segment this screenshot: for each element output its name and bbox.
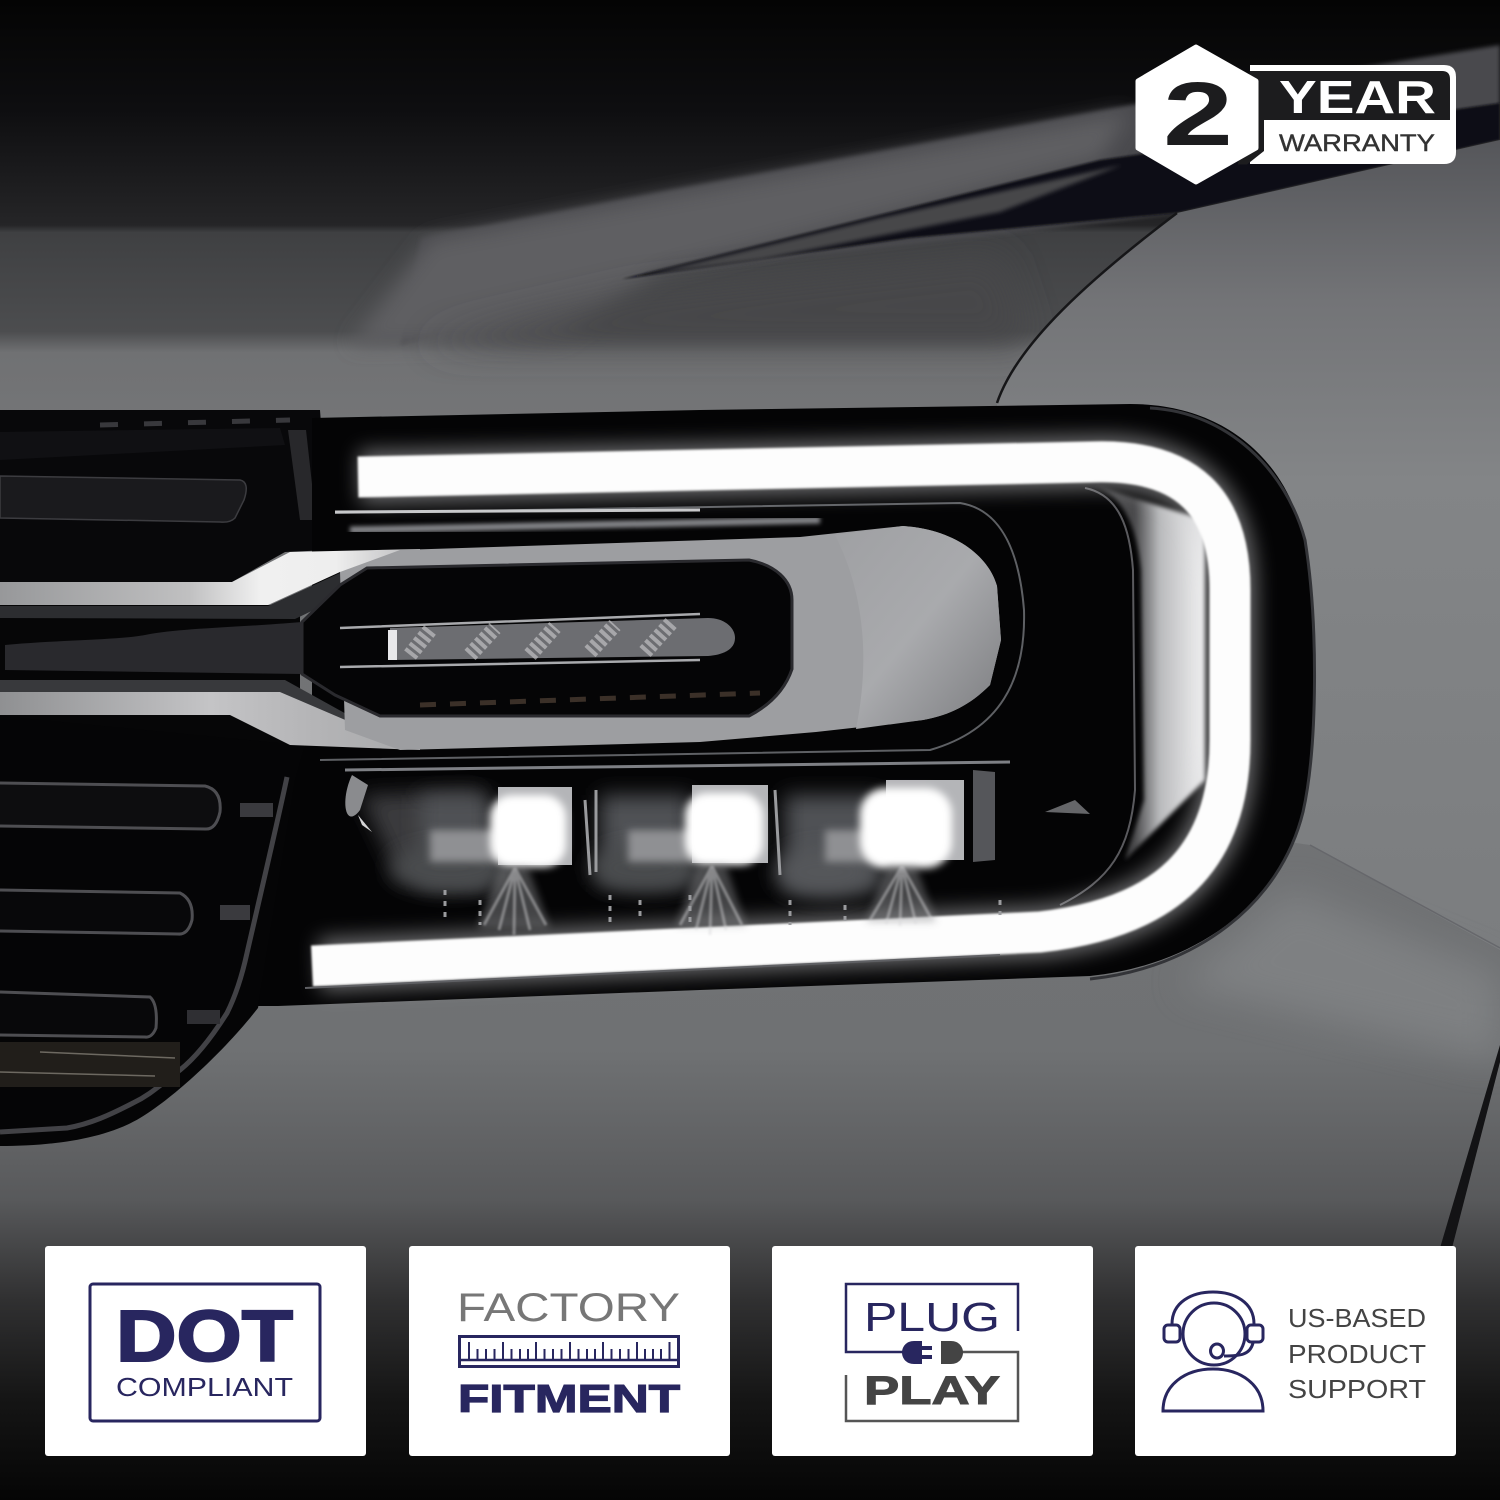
PLAY: PLAY: [864, 1369, 1000, 1413]
support text: SUPPORT: [1288, 1374, 1426, 1404]
COMPLIANT: COMPLIANT: [116, 1372, 293, 1402]
textured grille insert: [5, 622, 302, 674]
frame: [90, 1284, 320, 1421]
panel: plug and play: [772, 1246, 1093, 1456]
navy wire: [846, 1284, 1018, 1352]
warranty badge: [1138, 47, 1456, 182]
hood blade highlight: [645, 165, 1122, 275]
grey wire: [846, 1352, 1018, 1421]
ruler icon: [460, 1336, 678, 1366]
lower tube edge line: [305, 955, 1000, 988]
bezel cowl: [835, 526, 1001, 729]
inner lens edge: [1060, 488, 1135, 905]
FITMENT: FITMENT: [458, 1378, 680, 1421]
projector right: [860, 780, 964, 926]
FACTORY: FACTORY: [457, 1286, 680, 1330]
grille gap: [0, 605, 300, 745]
light tube glow: [320, 462, 1230, 965]
icon: socket: [941, 1341, 963, 1364]
small LED strip: [390, 618, 735, 660]
lower grille bar: [0, 692, 420, 750]
support text: [1288, 1303, 1426, 1404]
icon: plug: [902, 1341, 932, 1364]
badge outline box: [1250, 65, 1456, 164]
low beam bay: [345, 762, 1010, 770]
headlight housing: [258, 404, 1314, 1006]
chrome trims: [320, 503, 1024, 760]
projector window: [302, 560, 792, 716]
bezel silver surround: [340, 526, 1001, 750]
grille: upper left: [0, 410, 330, 582]
support text: US-BASED: [1288, 1303, 1426, 1333]
tube reflection: [1092, 485, 1205, 860]
panel: DOT compliant: [45, 1246, 366, 1456]
fender panel: [997, 140, 1500, 950]
badge dark field: [1238, 71, 1450, 164]
light tube: [312, 462, 1230, 966]
grille: lower left: [0, 712, 305, 1146]
YEAR: YEAR: [1279, 71, 1436, 123]
dark strip below top bar: [0, 568, 372, 619]
WARRANTY: WARRANTY: [1279, 130, 1435, 157]
dark crease under hood: [622, 103, 1500, 279]
icon: support agent with headset: [1163, 1292, 1263, 1411]
dark strip above lower bar: [0, 680, 420, 728]
wheel arch line: [1440, 1045, 1500, 1248]
hexagon: [1138, 47, 1256, 182]
DOT: DOT: [116, 1297, 293, 1377]
PLUG: PLUG: [864, 1294, 1000, 1340]
projector left: [478, 787, 572, 935]
bumper highlight: [1180, 890, 1500, 1060]
top grille bar: [0, 549, 420, 605]
headlight assembly: [0, 404, 1315, 1006]
projector center: [676, 785, 768, 935]
number 2: 2: [1163, 65, 1233, 165]
panel: US-based product support: [1135, 1246, 1456, 1456]
support text: PRODUCT: [1288, 1339, 1426, 1369]
panel: factory fitment: [409, 1246, 730, 1456]
